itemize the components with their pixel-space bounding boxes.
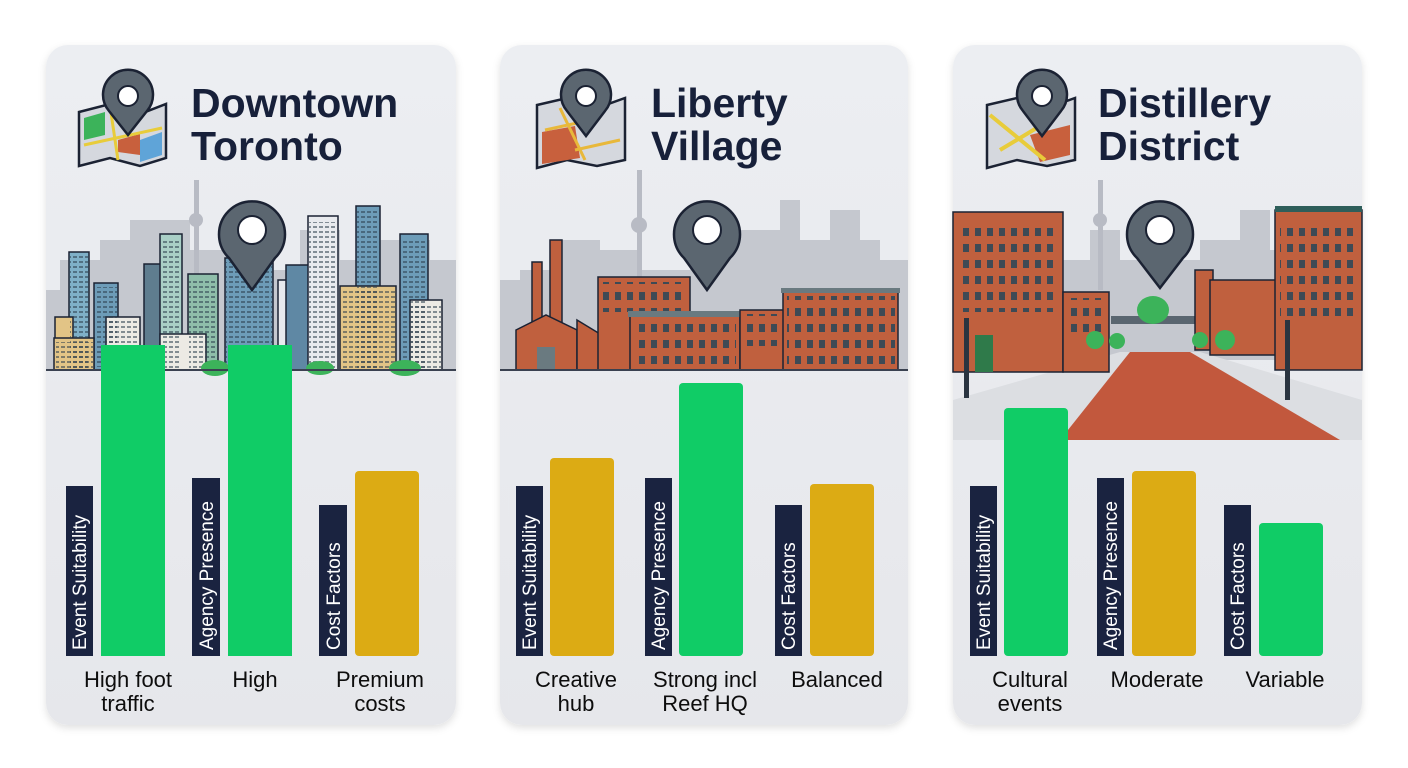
bar chart: distillery: Cost Factors xyxy=(1228,542,1249,650)
bar chart: distillery: Event Suitability xyxy=(974,514,995,650)
title: District xyxy=(1098,123,1240,169)
bar chart: distillery: Variable xyxy=(1245,667,1325,692)
bar chart: liberty village: Balanced xyxy=(791,667,883,692)
title: Distillery xyxy=(1098,80,1271,126)
bar chart: liberty village: Event Suitability xyxy=(520,514,541,650)
bar chart: liberty village: hub xyxy=(558,691,594,716)
bar chart: distillery: Cultural xyxy=(992,667,1068,692)
panel: liberty village xyxy=(500,45,908,725)
panel: distillery district xyxy=(953,45,1362,725)
title xyxy=(191,80,398,169)
title: Downtown xyxy=(191,80,398,126)
title xyxy=(1098,80,1271,169)
bar chart: distillery: Agency Presence xyxy=(1101,501,1122,650)
bar chart: distillery xyxy=(970,408,1325,716)
bar chart: downtown: Event Suitability xyxy=(70,514,91,650)
bar chart: downtown xyxy=(66,345,424,716)
icon: map with pin xyxy=(79,70,166,166)
bar chart: liberty village: Cost Factors xyxy=(779,542,800,650)
bar chart: liberty village: Creative xyxy=(535,667,617,692)
bar chart: liberty village xyxy=(516,383,883,716)
bar chart: downtown: High xyxy=(232,667,278,692)
title: Village xyxy=(651,123,782,169)
title xyxy=(651,80,788,169)
bar chart: liberty village: Agency Presence xyxy=(649,501,670,650)
bar chart: downtown: Agency Presence xyxy=(197,501,218,650)
icon: map with pin xyxy=(987,70,1075,168)
title: Toronto xyxy=(191,123,343,169)
bar chart: downtown: Premium xyxy=(336,667,424,692)
bar chart: liberty village: Strong incl xyxy=(653,667,757,692)
bar chart: distillery: events xyxy=(998,691,1062,716)
bar chart: distillery: Moderate xyxy=(1111,667,1203,692)
bar chart: liberty village: Reef HQ xyxy=(662,691,748,716)
title: Liberty xyxy=(651,80,788,126)
bar chart: downtown: traffic xyxy=(101,691,155,716)
panel: downtown toronto xyxy=(46,45,456,725)
bar chart: downtown: Cost Factors xyxy=(324,542,345,650)
illustration: downtown skyline xyxy=(46,180,456,376)
bar chart: downtown: High foot xyxy=(84,667,172,692)
bar chart: downtown: costs xyxy=(354,691,406,716)
illustration: distillery street xyxy=(953,180,1362,440)
illustration: liberty village factories xyxy=(500,170,908,371)
icon: map with pin xyxy=(537,70,625,168)
